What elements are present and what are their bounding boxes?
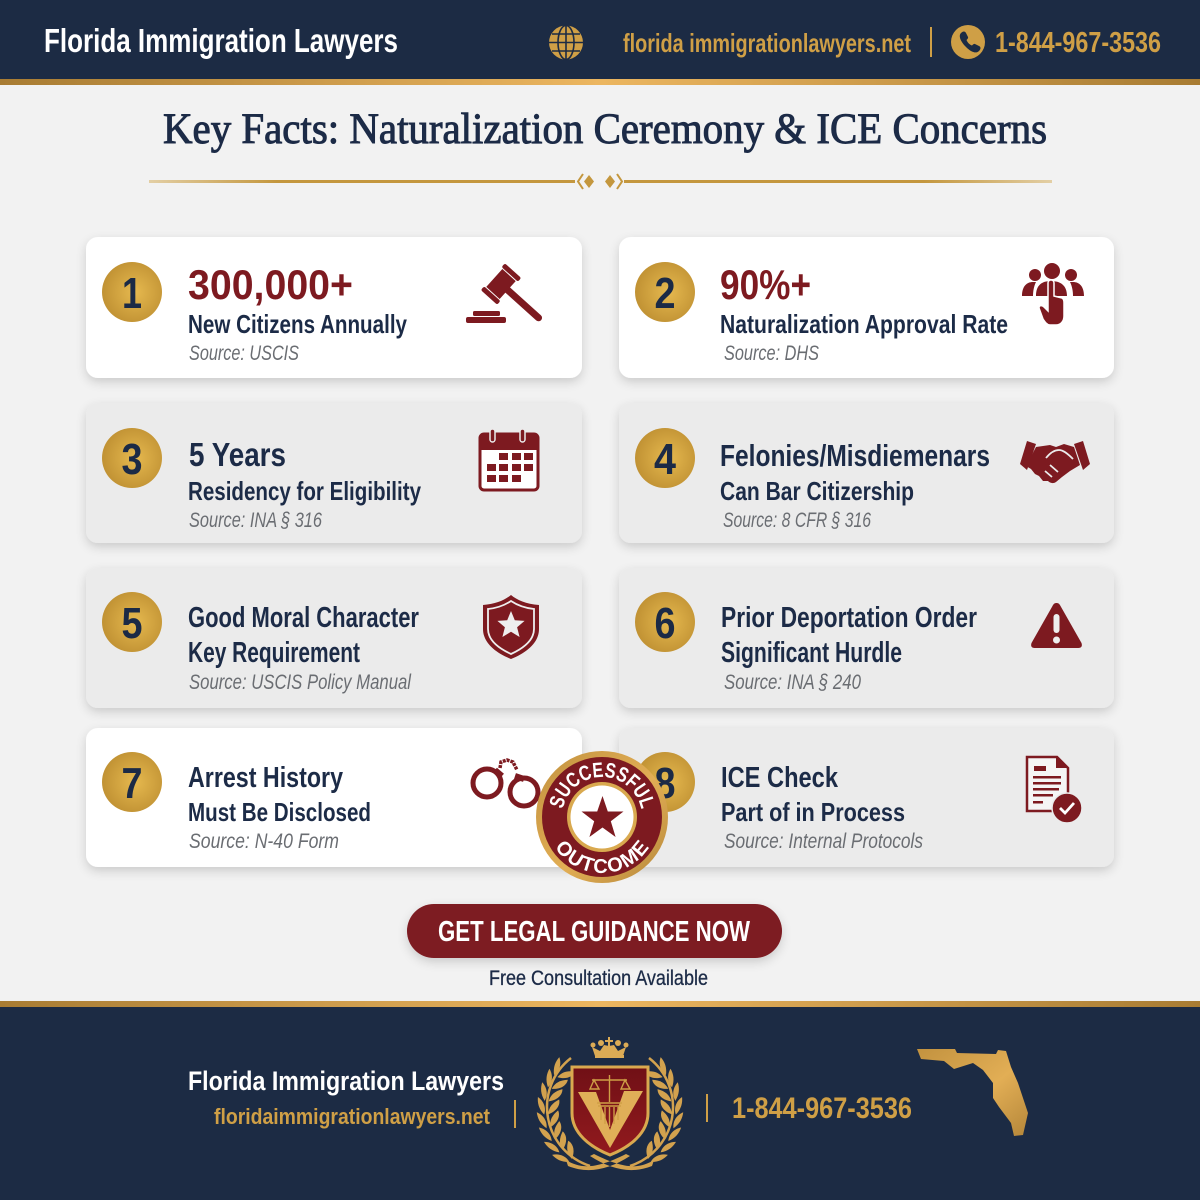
description: Can Bar Citizership: [720, 476, 914, 506]
heading: Prior Deportation Order: [721, 602, 977, 634]
icon: handcuffs: [473, 760, 538, 806]
icon: document with check: [1027, 757, 1082, 823]
number 6: [635, 592, 695, 652]
number 3: [102, 428, 162, 488]
panel: fact 3: [86, 403, 582, 543]
number 3: 3: [122, 435, 142, 484]
title ornament: [149, 174, 1052, 189]
icon: people with pointing hand: [1022, 263, 1084, 325]
number 5: [102, 592, 162, 652]
call to action button: GET LEGAL GUIDANCE NOW: [438, 916, 750, 948]
footer phone number: 1-844-967-3536: [732, 1092, 912, 1125]
number 4: [635, 428, 695, 488]
title: Key Facts: Naturalization Ceremony & ICE Concerns: [163, 106, 1047, 153]
description: Part of in Process: [721, 797, 905, 827]
panel: fact 2: [619, 237, 1114, 378]
icon: shield with star: [483, 595, 539, 659]
crown: [590, 1037, 628, 1058]
V emblem: [578, 1091, 643, 1148]
number 4: 4: [654, 435, 676, 484]
number 6: 6: [654, 599, 676, 648]
icon: warning triangle: [1031, 603, 1082, 648]
number 5: 5: [122, 599, 142, 648]
number 7: 7: [122, 759, 142, 808]
Florida map: [917, 1049, 1028, 1136]
panel: fact 6: [619, 568, 1114, 708]
heading: Good Moral Character: [188, 602, 419, 634]
heading: Arrest History: [188, 762, 343, 794]
source: Source: INA § 240: [724, 671, 861, 694]
number 1: [102, 262, 162, 322]
statistic: 300,000+: [188, 261, 353, 308]
panel: fact 8: [619, 728, 1114, 867]
header firm name: Florida Immigration Lawyers: [44, 22, 398, 59]
heading: 5 Years: [189, 436, 286, 473]
source: Source: USCIS Policy Manual: [189, 671, 412, 694]
badge bottom text: OUTCOME: [557, 840, 649, 874]
number 2: [635, 262, 695, 322]
badge: successful outcome: [536, 751, 668, 883]
number 8: [635, 752, 695, 812]
badge star: [582, 796, 624, 837]
shield: [572, 1067, 648, 1155]
panel: fact 7: [86, 728, 582, 867]
source: Source: Internal Protocols: [724, 830, 923, 853]
icon: phone: [951, 25, 985, 59]
panel: fact 4: [619, 403, 1114, 543]
number 2: 2: [654, 269, 676, 318]
source: Source: N-40 Form: [189, 830, 339, 853]
footer website: floridaimmigrationlawyers.net: [214, 1104, 491, 1129]
icon: globe: [549, 26, 583, 60]
panel: fact 1: [86, 237, 582, 378]
statistic: 90%+: [720, 261, 811, 308]
consultation note: Free Consultation Available: [489, 967, 708, 990]
badge top text: SUCCESSFUL: [550, 762, 654, 809]
source: Source: 8 CFR § 316: [723, 509, 871, 532]
icon: handshake: [1020, 441, 1090, 483]
footer firm name: Florida Immigration Lawyers: [188, 1066, 504, 1096]
footer: [0, 1001, 1200, 1200]
footer logo: [536, 1037, 684, 1170]
description: New Citizens Annually: [188, 309, 407, 339]
header phone number: 1-844-967-3536: [995, 27, 1161, 59]
header divider: [930, 27, 932, 57]
heading: Felonies/Misdiemenars: [720, 438, 990, 473]
footer dividers: [515, 1094, 707, 1128]
header bar: [0, 0, 1200, 85]
description: Must Be Disclosed: [188, 797, 371, 827]
heading: ICE Check: [721, 762, 839, 794]
number 7: [102, 752, 162, 812]
number 8: 8: [654, 759, 676, 808]
source: Source: USCIS: [189, 342, 299, 365]
description: Residency for Eligibility: [188, 476, 421, 506]
scales and courthouse: [590, 1075, 630, 1127]
source: Source: INA § 316: [189, 509, 322, 532]
description: Key Requirement: [188, 637, 360, 669]
panel: fact 5: [86, 568, 582, 708]
laurel wreath: [536, 1057, 684, 1170]
icon: gavel: [466, 263, 553, 334]
icon: calendar: [480, 429, 538, 490]
source: Source: DHS: [724, 342, 819, 365]
call to action button: [407, 904, 782, 958]
description: Naturalization Approval Rate: [720, 309, 1008, 339]
number 1: 1: [122, 269, 142, 318]
header website: florida immigrationlawyers.net: [623, 28, 911, 58]
description: Significant Hurdle: [721, 637, 902, 669]
